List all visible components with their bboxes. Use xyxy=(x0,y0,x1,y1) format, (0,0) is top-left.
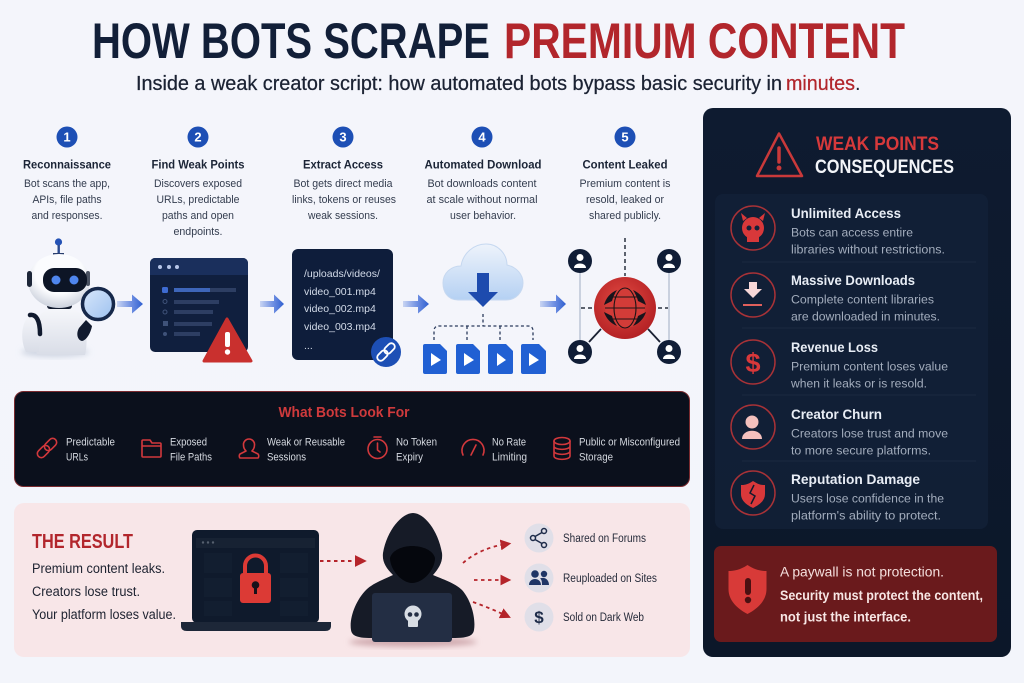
step 2: find weak points: endpoints. xyxy=(174,226,222,238)
item: unlimited access xyxy=(731,205,945,256)
item: creator churn: Creator Churn xyxy=(791,406,882,422)
step 4: automated download: Bot downloads content xyxy=(428,178,537,190)
step 1: reconnaissance: 1 xyxy=(63,130,71,144)
item: no token expiry xyxy=(368,436,437,464)
item: public or misconfigured storage xyxy=(554,436,680,464)
item: unlimited access: Bots can access entire xyxy=(791,226,913,240)
step 2: find weak points: URLs, predictable xyxy=(156,194,240,206)
step 2: find weak points: Discovers exposed xyxy=(154,178,242,190)
heading: the result: THE RESULT xyxy=(32,531,133,553)
item: reputation damage: Reputation Damage xyxy=(791,471,920,487)
outcome: shared on forums xyxy=(524,524,646,552)
subtitle: minutes xyxy=(786,73,855,95)
item: weak or reusable sessions: Weak or Reusable xyxy=(267,436,345,448)
step 3: extract access: links, tokens or reuses xyxy=(292,194,396,206)
item: no token expiry: No Token xyxy=(396,436,437,448)
arrow: reuploaded on sites xyxy=(474,579,507,581)
subtitle: . xyxy=(855,73,861,95)
outcome: sold on dark web: Sold on Dark Web xyxy=(563,612,644,624)
icon: locked laptop xyxy=(181,530,331,631)
icon: warning triangle xyxy=(757,134,802,176)
step 2: find weak points xyxy=(152,126,245,238)
outcome: reuploaded on sites: Reuploaded on Sites xyxy=(563,573,657,585)
item: revenue loss: Revenue Loss xyxy=(791,339,878,355)
step 5: content leaked: resold, leaked or xyxy=(586,194,664,206)
result text lines xyxy=(32,561,176,622)
arrow: cloud to leak network xyxy=(540,294,566,314)
item: no token expiry: Expiry xyxy=(396,452,423,464)
arrow: file list to cloud xyxy=(403,294,429,314)
file list panel: video_001.mp4 xyxy=(304,286,376,298)
outcome: reuploaded on sites xyxy=(524,564,657,592)
item: no rate limiting: No Rate xyxy=(492,436,526,448)
subtitle: Inside a weak creator script: how automated bots bypass basic security in xyxy=(136,73,782,95)
item: unlimited access: Unlimited Access xyxy=(791,205,901,221)
step 2: find weak points: Find Weak Points xyxy=(152,158,245,172)
item: creator churn: to more secure platforms. xyxy=(791,444,931,458)
callout: a paywall is not protection: A paywall is not protection. xyxy=(780,564,944,580)
callout: a paywall is not protection xyxy=(714,546,997,642)
item: exposed file paths xyxy=(142,436,212,464)
step 5: content leaked: Content Leaked xyxy=(582,158,668,172)
heading: weak points consequences: WEAK POINTS xyxy=(816,133,939,155)
item: exposed file paths: Exposed xyxy=(170,436,207,448)
file list panel: video_002.mp4 xyxy=(304,303,376,315)
item: revenue loss: $ xyxy=(745,348,761,378)
step 4: automated download xyxy=(424,126,542,222)
step 2: find weak points: paths and open xyxy=(162,210,234,222)
arrow: robot to window xyxy=(117,294,143,314)
callout: a paywall is not protection: not just the interface. xyxy=(780,610,911,624)
file list panel xyxy=(292,249,401,367)
step 1: reconnaissance: Reconnaissance xyxy=(23,158,111,172)
panel: the result xyxy=(14,503,690,657)
arrow: shared on forums xyxy=(463,544,507,563)
step 1: reconnaissance xyxy=(23,126,111,222)
file list panel: /uploads/videos/ xyxy=(304,268,380,280)
panel: what bots look for xyxy=(14,392,690,486)
result text lines: Creators lose trust. xyxy=(32,584,140,599)
icon: cloud download with files xyxy=(423,244,546,374)
item: predictable urls: URLs xyxy=(66,452,88,464)
step 4: automated download: at scale without normal xyxy=(426,194,538,206)
file list panel: ... xyxy=(304,340,313,352)
title: PREMIUM CONTENT xyxy=(504,13,905,69)
item: weak or reusable sessions xyxy=(239,436,345,464)
outcome: shared on forums: Shared on Forums xyxy=(563,533,646,545)
item: no rate limiting: Limiting xyxy=(492,452,527,464)
step 1: reconnaissance: APIs, file paths xyxy=(32,194,102,206)
item: predictable urls xyxy=(36,436,115,464)
heading: weak points consequences: CONSEQUENCES xyxy=(815,156,954,178)
item: reputation damage xyxy=(731,471,944,522)
result text lines: Premium content leaks. xyxy=(32,561,165,576)
step 4: automated download: user behavior. xyxy=(450,210,516,222)
heading: weak points consequences xyxy=(815,133,954,178)
step 4: automated download: Automated Download xyxy=(424,158,542,172)
step 3: extract access xyxy=(292,126,396,222)
arrow: window to file list xyxy=(260,294,284,314)
file list panel: video_003.mp4 xyxy=(304,321,376,333)
icon: browser window with warning xyxy=(150,258,251,361)
item: revenue loss: when it leaks or is resold. xyxy=(790,376,927,390)
item: creator churn xyxy=(731,405,948,458)
item: predictable urls: Predictable xyxy=(66,436,115,448)
outcome: sold on dark web xyxy=(524,602,644,632)
item: revenue loss: Premium content loses value xyxy=(791,360,948,374)
item: exposed file paths: File Paths xyxy=(170,452,212,464)
result text lines: Your platform loses value. xyxy=(32,607,176,622)
item: massive downloads: are downloaded in minutes. xyxy=(791,310,940,324)
icon: hooded hacker xyxy=(349,513,477,647)
step 2: find weak points: 2 xyxy=(194,130,202,144)
step 3: extract access: Extract Access xyxy=(303,158,383,172)
item: public or misconfigured storage: Public or Misconfigured xyxy=(579,436,680,448)
step 4: automated download: 4 xyxy=(478,130,486,144)
item: creator churn: Creators lose trust and move xyxy=(791,426,948,440)
item: weak or reusable sessions: Sessions xyxy=(267,452,306,464)
panel: weak points consequences xyxy=(703,108,1011,657)
title: HOW BOTS SCRAPE xyxy=(92,13,490,69)
icon: leak network with globe xyxy=(568,238,681,364)
step 5: content leaked: 5 xyxy=(621,130,629,144)
step 5: content leaked xyxy=(580,126,671,222)
title xyxy=(92,13,905,69)
arrow: sold on dark web xyxy=(473,602,507,616)
step 3: extract access: 3 xyxy=(339,130,347,144)
item: revenue loss xyxy=(731,339,948,390)
step 5: content leaked: Premium content is xyxy=(580,178,671,190)
callout: a paywall is not protection: Security must protect the content, xyxy=(780,588,983,603)
item: massive downloads: Complete content libraries xyxy=(791,292,934,306)
step 5: content leaked: shared publicly. xyxy=(589,210,661,222)
step 3: extract access: weak sessions. xyxy=(307,210,378,222)
outcome: sold on dark web: $ xyxy=(534,608,544,627)
step 3: extract access: Bot gets direct media xyxy=(294,178,393,190)
item: reputation damage: Users lose confidence in the xyxy=(791,492,944,506)
heading: what bots look for: What Bots Look For xyxy=(278,404,410,421)
icon: robot with magnifier xyxy=(21,238,114,357)
item: public or misconfigured storage: Storage xyxy=(579,452,613,464)
item: massive downloads: Massive Downloads xyxy=(791,272,915,288)
step 1: reconnaissance: and responses. xyxy=(32,210,102,222)
step 1: reconnaissance: Bot scans the app, xyxy=(24,178,110,190)
item: reputation damage: platform's ability to protect. xyxy=(791,508,941,522)
item: no rate limiting xyxy=(462,436,527,464)
arrow: laptop to hacker xyxy=(320,560,362,562)
item: massive downloads xyxy=(731,272,940,324)
item: unlimited access: libraries without restrictions. xyxy=(791,242,945,256)
card: consequences list xyxy=(715,194,988,529)
